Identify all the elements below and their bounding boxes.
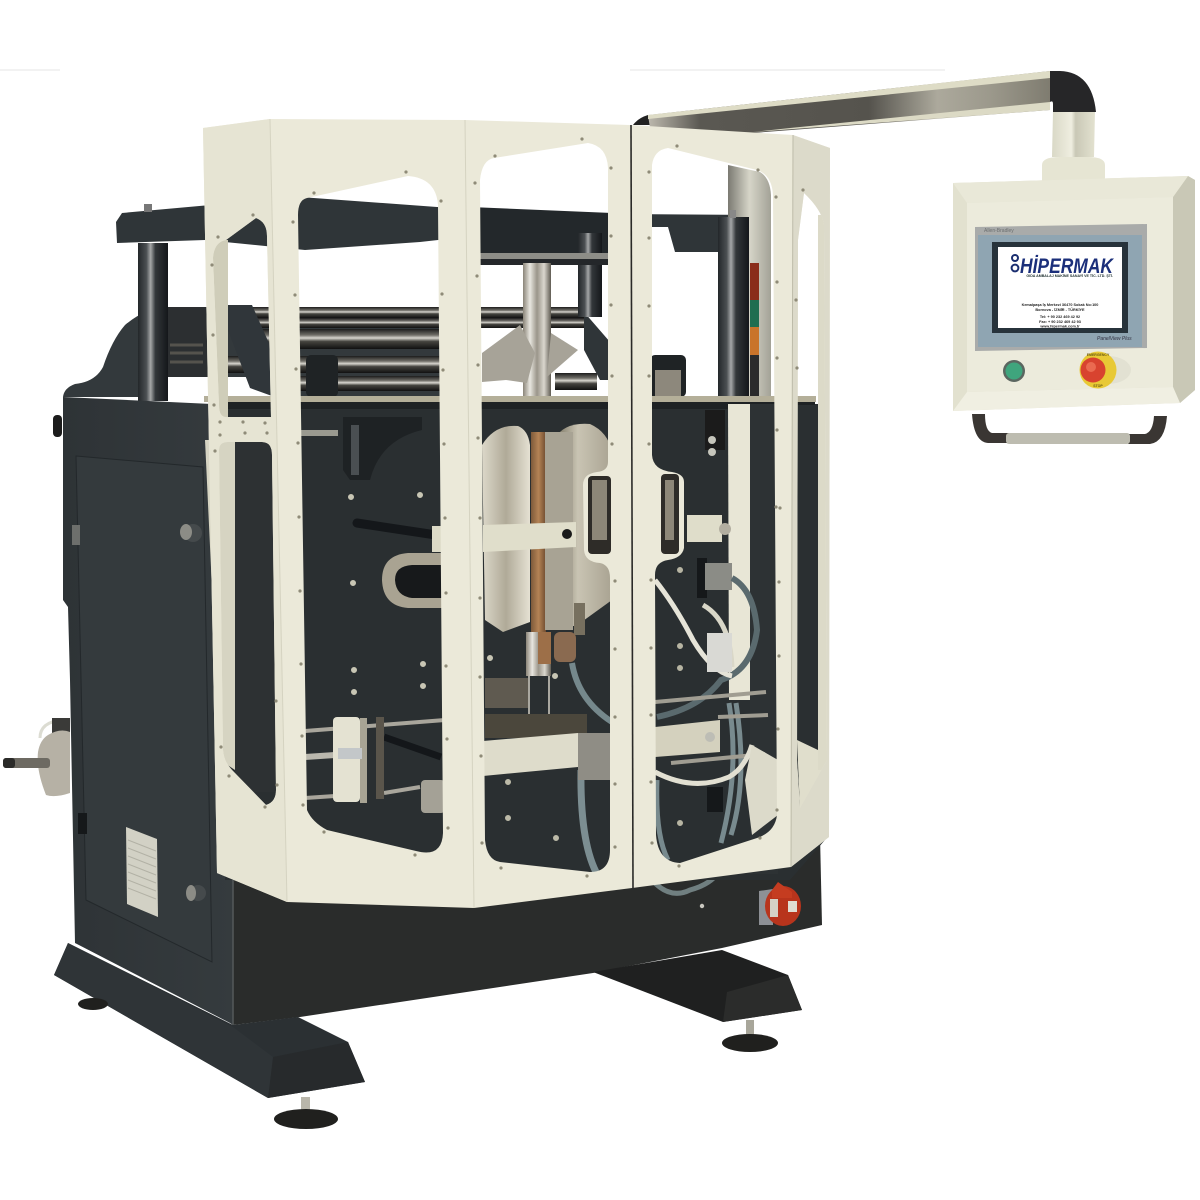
cream safety frame bbox=[203, 119, 830, 908]
levelling feet bbox=[78, 998, 778, 1129]
right foot end face bbox=[723, 975, 802, 1022]
needles bbox=[529, 676, 549, 722]
white gap under rollers bbox=[168, 251, 470, 397]
side window contents bbox=[796, 215, 828, 810]
electric grey cable bbox=[657, 578, 757, 717]
table plate bbox=[204, 396, 816, 409]
steel rods bbox=[655, 692, 768, 763]
side knob bbox=[53, 415, 62, 437]
window 1 upper reveal bbox=[211, 240, 228, 417]
ventilation louvre bbox=[126, 827, 158, 917]
side latch bbox=[78, 813, 87, 834]
jaw rail bbox=[485, 714, 587, 738]
rollers bbox=[226, 307, 597, 391]
left wing plate bbox=[482, 426, 530, 632]
HMI grey surround bbox=[975, 224, 1147, 351]
left foot end face bbox=[268, 1042, 365, 1098]
box bottom bevel bbox=[953, 387, 1180, 411]
frame fixing screws bbox=[212, 139, 803, 876]
arm top lip bbox=[648, 71, 1050, 119]
lower cross bar bbox=[483, 733, 578, 776]
right roller bracket bbox=[584, 312, 610, 380]
logo gear icon bbox=[1012, 255, 1018, 271]
arm left elbow bbox=[633, 115, 650, 125]
panel bolts bbox=[677, 570, 683, 823]
lower white tube bbox=[655, 745, 752, 783]
door gap bbox=[631, 125, 633, 888]
door window contents bbox=[652, 404, 778, 874]
box right side bbox=[1173, 176, 1195, 403]
door knob top bbox=[180, 524, 202, 542]
city: Bornova - İZMİR - TÜRKİYE bbox=[1035, 307, 1085, 312]
top plate and cross bars bbox=[116, 197, 762, 252]
right cream plate bbox=[745, 745, 778, 835]
air hose lower bbox=[581, 770, 596, 872]
arm profile bbox=[648, 71, 1050, 133]
box face bbox=[967, 197, 1173, 392]
rear housing bbox=[63, 307, 470, 397]
left facet shading bbox=[203, 119, 287, 902]
rear center column bbox=[578, 233, 602, 317]
small steel plate bbox=[485, 678, 528, 708]
vent tag bbox=[574, 603, 585, 635]
housing end plate bbox=[168, 307, 208, 377]
bolts bbox=[490, 658, 555, 676]
inner dark backplate bbox=[225, 404, 825, 880]
overhead support arm bbox=[633, 71, 1105, 182]
front corner highlight bbox=[232, 880, 234, 1025]
door handle right bbox=[661, 474, 679, 554]
arm right elbow bbox=[1050, 71, 1096, 112]
HMI dark bezel bbox=[992, 242, 1128, 333]
handwheel assembly bbox=[3, 718, 70, 796]
former top plate bbox=[480, 253, 608, 265]
power socket bbox=[759, 882, 801, 926]
crank handle bbox=[3, 758, 50, 768]
door side bracket bbox=[650, 355, 686, 397]
box outer shell bbox=[953, 176, 1195, 411]
rear pillar panel bbox=[728, 165, 771, 400]
telephone: Tel: + 90 232 469 42 92 bbox=[1040, 315, 1080, 319]
right base foot bbox=[593, 950, 802, 1022]
cream rod block bbox=[432, 526, 446, 552]
lower bracket bbox=[707, 787, 723, 812]
aluminium block bbox=[545, 432, 573, 630]
left base foot bbox=[54, 943, 365, 1098]
upper dark panel bbox=[652, 409, 728, 520]
air tube bbox=[40, 720, 62, 738]
valve bbox=[52, 718, 70, 738]
sensor box bbox=[697, 558, 732, 598]
bar fixing bbox=[562, 529, 572, 539]
center bracket bbox=[306, 355, 338, 397]
short white tube bbox=[703, 605, 732, 667]
wire bundle bbox=[554, 632, 576, 662]
background horizon line bbox=[0, 69, 945, 71]
right facet shading bbox=[791, 135, 830, 867]
lower front skirt bbox=[233, 835, 822, 1025]
jaw block bbox=[578, 733, 612, 780]
address: Kemalpaşa İş Merkezi 36470 Sokak No:100 bbox=[1022, 303, 1098, 307]
forming tube bbox=[523, 263, 551, 433]
cabinet left wall bbox=[63, 397, 233, 1025]
black rod bbox=[357, 523, 436, 535]
arm collar bbox=[1042, 157, 1105, 182]
service door outline bbox=[76, 456, 212, 962]
HMI blue bezel bbox=[978, 235, 1142, 347]
valve block bbox=[707, 633, 732, 672]
top bolt bbox=[144, 204, 152, 212]
panel bolts window 2 bbox=[351, 495, 423, 692]
logo wordmark: HİPERMAK bbox=[1020, 254, 1114, 278]
fax: Fax: + 90 232 469 42 93 bbox=[1039, 320, 1081, 324]
door knob bottom bbox=[186, 885, 206, 901]
control box bbox=[953, 176, 1195, 444]
right wing plate bbox=[555, 424, 612, 626]
company name: GIDA AMBALAJ MAKİNE SANAYİ VE TİC. LTD. ŞTİ. bbox=[1026, 274, 1113, 278]
top bar behind center window bbox=[470, 207, 612, 254]
HMI model label: PanelView Plus bbox=[1097, 336, 1132, 342]
left roller bracket bbox=[227, 305, 272, 396]
lower window bolts bbox=[508, 782, 556, 838]
green start button bbox=[1003, 360, 1025, 382]
seal mechanism window 2 bbox=[305, 717, 445, 813]
machine cabinet bbox=[53, 397, 822, 1025]
facet creases bbox=[270, 119, 474, 908]
air hose upper bbox=[572, 663, 612, 722]
door handle left bbox=[588, 476, 611, 554]
carry handle bbox=[972, 414, 1167, 444]
hose loop below door bbox=[652, 870, 720, 893]
stack light tower bbox=[750, 263, 759, 397]
bracket in window 2 bbox=[298, 417, 422, 480]
right dark panel bbox=[750, 404, 778, 874]
cream pillar bbox=[728, 404, 751, 700]
cream guide block bbox=[687, 515, 731, 542]
lower tube bbox=[526, 632, 551, 676]
right pillar bbox=[718, 210, 749, 407]
arm bottom lip bbox=[753, 102, 1050, 132]
top plate behind door window bbox=[610, 214, 762, 252]
HMI brand mark: Allen-Bradley bbox=[984, 228, 1014, 234]
window 1 lower dark panel and reveal bbox=[205, 440, 277, 792]
hopper flange bbox=[382, 553, 443, 608]
emergency stop legend: EMERGENCY bbox=[1087, 353, 1110, 357]
sealing wings bbox=[482, 424, 612, 872]
HMI screen bbox=[998, 247, 1122, 328]
skirt bolt bbox=[700, 904, 704, 908]
wire mesh former bbox=[482, 325, 578, 383]
frame panels with window cutouts bbox=[203, 119, 830, 908]
box top bevel bbox=[953, 176, 1188, 203]
website: www.hipermak.com.tr bbox=[1039, 324, 1080, 328]
copper tube bbox=[531, 432, 546, 634]
door cross plate bbox=[655, 720, 720, 757]
left foot top bevel bbox=[54, 943, 273, 1098]
wheel disc bbox=[38, 731, 70, 796]
left pillar bbox=[138, 243, 168, 401]
upper cross bar bbox=[483, 522, 576, 552]
white pneumatic tube bbox=[655, 580, 732, 676]
hinge block bbox=[705, 410, 725, 456]
emergency stop button bbox=[1080, 352, 1131, 388]
grey hoses bbox=[657, 703, 741, 860]
arm drop tube bbox=[1052, 112, 1095, 157]
door hinge bbox=[72, 525, 80, 545]
plate bolt bbox=[705, 732, 715, 742]
stop legend: STOP bbox=[1093, 384, 1103, 388]
